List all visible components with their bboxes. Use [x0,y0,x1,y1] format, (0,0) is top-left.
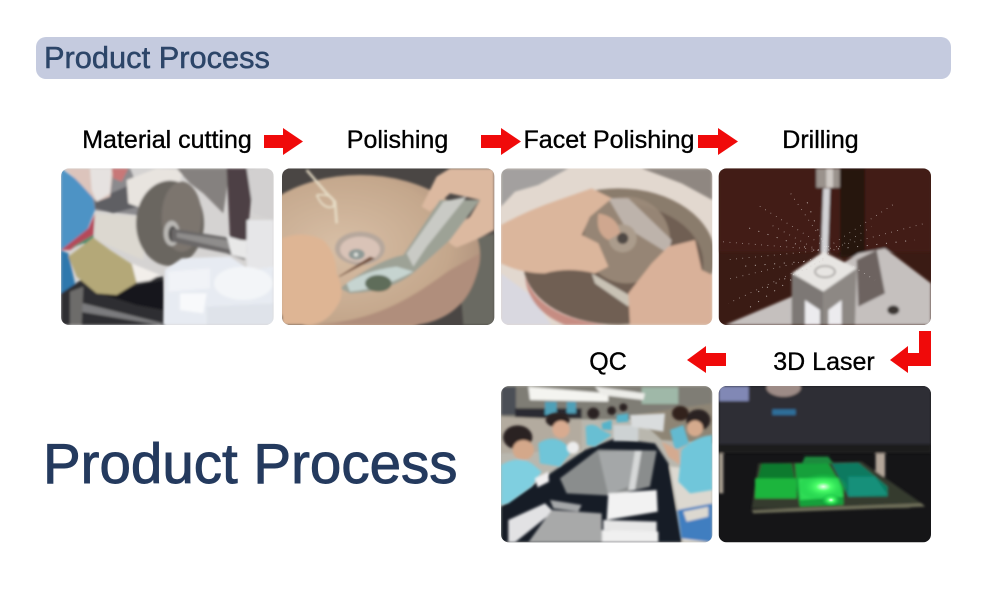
label: QC: QC [589,348,627,376]
large title: Product Process [43,432,458,495]
label: Polishing: Polishing [347,126,448,154]
label: Facet Polishing: Facet Polishing [524,126,694,154]
QC workers [501,403,712,505]
heading text: Product Process [44,40,270,75]
arrow: cutting to polishing [264,128,303,155]
photo: material cutting [61,168,274,325]
arrow: 3D laser to QC [687,346,726,373]
arrow: polishing to facet polishing [481,128,521,155]
label: Drilling: Drilling [782,126,859,154]
label: Material cutting: Material cutting [82,126,252,154]
heading bar [36,37,951,79]
photo: polishing [282,168,494,325]
label: 3D Laser: 3D Laser [773,348,875,376]
arrow: facet polishing to drilling [698,128,738,155]
spray droplets [722,190,925,308]
photo: QC [501,386,712,542]
photo: facet polishing [501,168,715,325]
arrow: drilling to 3D laser [890,331,931,373]
photo: drilling [719,168,931,325]
photo: 3D laser [719,378,931,542]
